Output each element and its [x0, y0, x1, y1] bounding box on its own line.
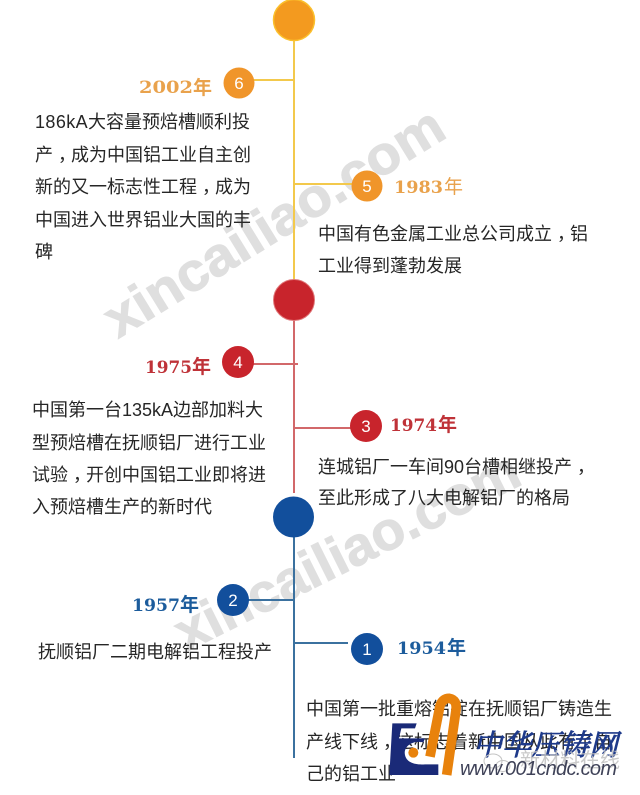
- event 1: 1954: 中国第一批重熔铝锭在抚顺铝厂铸造生: [306, 699, 612, 719]
- event 2: 1957: 抚顺铝厂二期电解铝工程投产: [38, 642, 272, 662]
- logo: 中华压铸网: 新材料在线: [520, 749, 620, 772]
- timeline segment: yellow: [254, 38, 354, 282]
- logo: 中华压铸网: www.001cndc.com: [460, 758, 617, 780]
- node: middle red circle: [274, 280, 314, 320]
- event 4: 1975: 试验 ，开创中国铝工业即将进: [32, 465, 266, 485]
- event 4: 1975: 年: [192, 352, 211, 379]
- event 6: 2002: [35, 68, 254, 262]
- event 6: 2002: 中国进入世界铝业大国的丰: [35, 210, 251, 230]
- event 1: 1954: 己的铝工业: [306, 764, 396, 784]
- event 3: 1974: 1974: [390, 416, 437, 436]
- event 4: 1975: 4: [233, 353, 243, 372]
- event 2: 1957: 2: [228, 591, 238, 610]
- event 4: 1975: 1975: [145, 358, 192, 378]
- event 3: 1974: 3: [361, 417, 371, 436]
- event 3: 1974: 连城铝厂一车间90台槽相继投产 ，: [318, 457, 595, 477]
- event 5: 1983: [318, 170, 588, 276]
- event 2: 1957: 1957: [132, 596, 180, 616]
- event 2: 1957: [38, 584, 272, 662]
- event 6: 2002: 碑: [35, 242, 53, 262]
- event 6: 2002: 2002: [139, 78, 193, 98]
- event 2: 1957: 年: [180, 590, 199, 617]
- event 3: 1974: 至此形成了八大电解铝厂的格局: [318, 488, 570, 508]
- event 5: 1983: 中国有色金属工业总公司成立 ，铝: [318, 224, 588, 244]
- event 4: 1975: 型预焙槽在抚顺铝厂进行工业: [32, 433, 266, 453]
- event 6: 2002: 6: [234, 74, 244, 93]
- event 1: 1954: 1954: [397, 639, 446, 659]
- event 6: 2002: 年: [193, 73, 212, 100]
- event 5: 1983: 5: [362, 177, 372, 196]
- event 3: 1974: 年: [438, 410, 457, 437]
- event 1: 1954: [306, 633, 612, 784]
- event 1: 1954: 产线下线 ，这标志着新中国从此有了自: [306, 732, 612, 752]
- event 6: 2002: 新的又一标志性工程 ，成为: [35, 177, 251, 197]
- node: top orange circle: [274, 0, 314, 40]
- node: lower blue circle: [273, 496, 314, 538]
- event 5: 1983: 工业得到蓬勃发展: [318, 256, 462, 276]
- logo: 中华压铸网: [389, 698, 622, 780]
- event 4: 1975: 入预焙槽生产的新时代: [32, 497, 212, 517]
- watermark: upper: xincailiao.com: [93, 95, 455, 349]
- event 5: 1983: 1983: [394, 178, 443, 198]
- event 6: 2002: 产 ，成为中国铝工业自主创: [35, 145, 251, 165]
- watermark: lower: xincailiao.com: [165, 440, 530, 663]
- event 3: 1974: [318, 410, 595, 508]
- event 4: 1975: 中国第一台135kA边部加料大: [32, 400, 263, 420]
- event 4: 1975: [32, 346, 266, 517]
- timeline segment: red: [252, 316, 352, 493]
- logo: 中华压铸网: 中华压铸网: [473, 723, 622, 764]
- event 1: 1954: 1: [362, 640, 372, 659]
- event 6: 2002: 186kA大容量预焙槽顺利投: [35, 112, 250, 132]
- event 1: 1954: 年: [447, 633, 466, 660]
- event 5: 1983: 年: [444, 172, 463, 199]
- timeline segment: blue: [248, 532, 348, 758]
